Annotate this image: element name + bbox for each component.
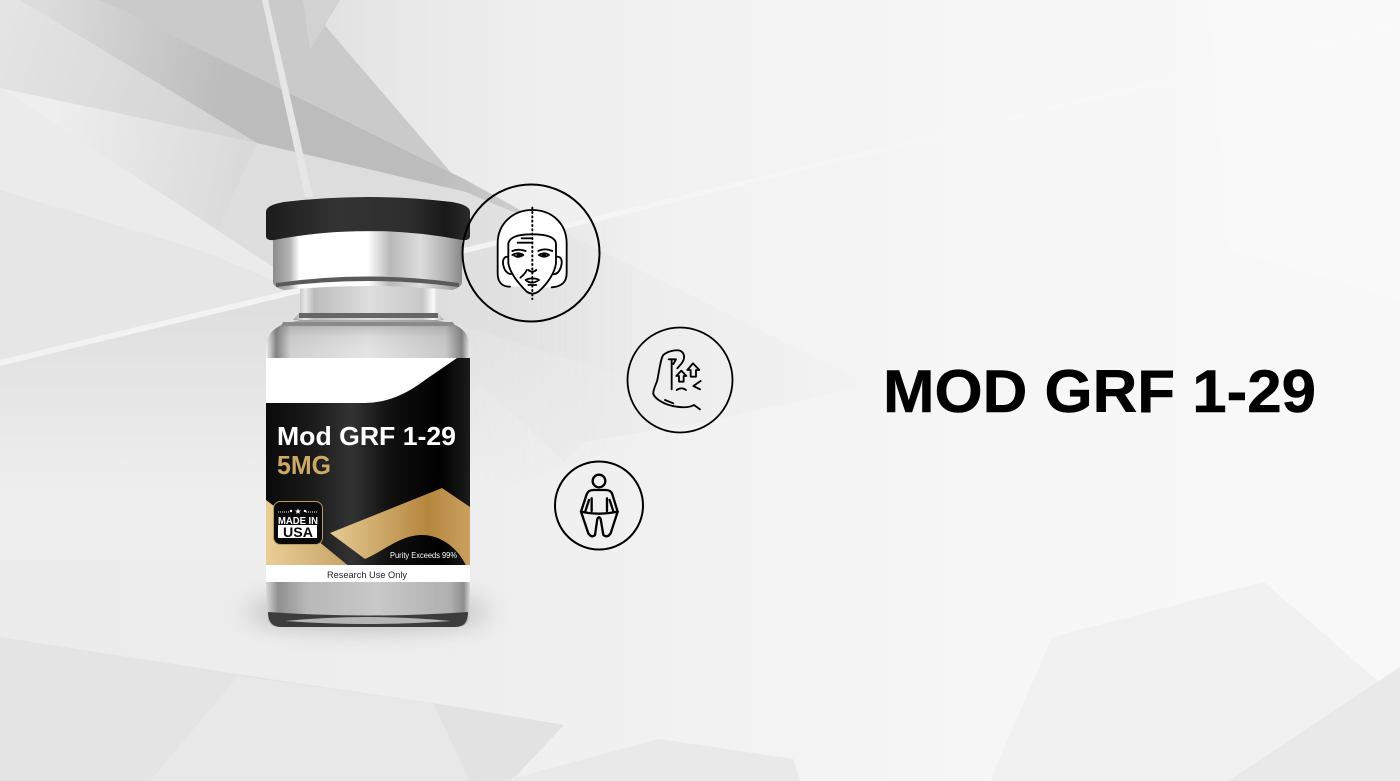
light streaks: [262, 0, 313, 197]
black cap: [266, 197, 470, 240]
label: white top area: [266, 358, 457, 403]
vial neck: [293, 280, 444, 320]
icon: face aging: [462, 184, 600, 322]
title: MOD GRF 1-29: [883, 358, 1316, 425]
vial shoulder: [266, 320, 470, 362]
product vial: [266, 197, 470, 627]
metal crimp: [273, 232, 462, 290]
vial glass base: [266, 582, 470, 627]
icon: muscle growth: [628, 328, 732, 432]
badge: made in USA: USA: [283, 525, 313, 540]
icon: waist slimming: [555, 462, 643, 550]
badge: made in USA: MADE IN: [278, 515, 318, 527]
vial shadow: [246, 597, 490, 627]
label: white band: [266, 565, 470, 582]
badge: made in USA: [274, 502, 322, 544]
vial neck rings: [299, 313, 438, 318]
badge: made in USA: ★: [294, 507, 302, 516]
label strength: 5MG: [277, 450, 331, 480]
label: gold left swoosh: [266, 500, 348, 566]
label: black body: [266, 358, 470, 565]
label purity note: Purity Exceeds 99%: [390, 551, 457, 560]
label name: Mod GRF 1-29: [277, 421, 456, 451]
label use note: Research Use Only: [327, 570, 407, 581]
label: gold right swoosh: [330, 488, 470, 566]
